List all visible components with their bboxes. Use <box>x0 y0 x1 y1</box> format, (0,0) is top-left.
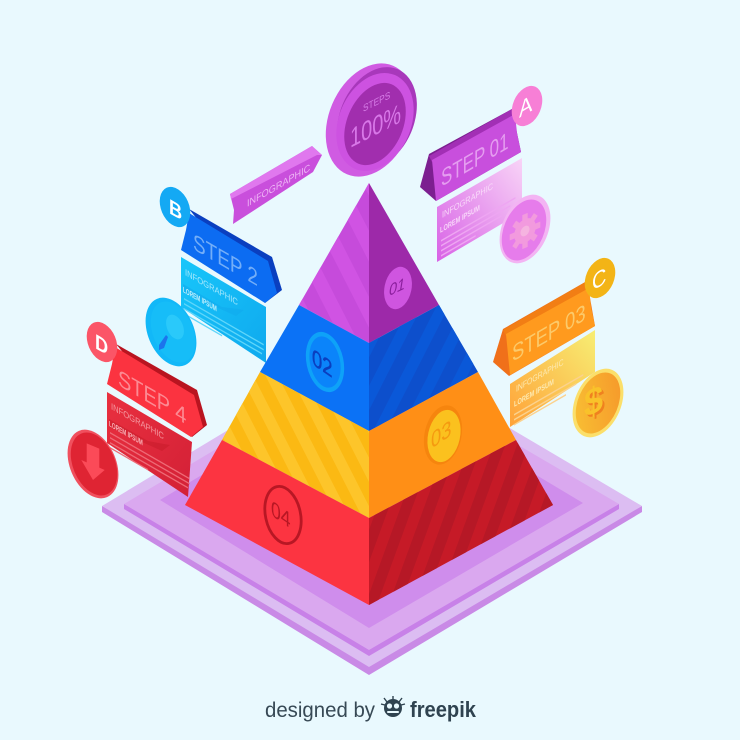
step 03 ribbon: STEP 03 <box>512 298 586 367</box>
step 2 text card <box>181 257 266 363</box>
step 03 text card <box>510 330 595 427</box>
step 2 letter badge <box>154 182 196 232</box>
step 4 ribbon <box>107 344 207 437</box>
step 03 letter badge <box>579 253 621 303</box>
number badge 03 <box>419 402 467 468</box>
step 2 ribbon <box>181 209 282 303</box>
step 2 text card: INFOGRAPHIC <box>185 267 238 308</box>
layer 02 blue <box>260 305 478 431</box>
step 01 letter badge: A <box>519 89 533 123</box>
panel: step 4 <box>58 317 207 506</box>
step 4 letter badge <box>81 317 123 367</box>
footer attribution: designed by <box>265 699 375 722</box>
layer 03 yellow orange <box>222 372 516 518</box>
step 01 text card: LOREM IPSUM <box>440 203 480 235</box>
number badge 02 <box>301 328 349 396</box>
number badge 03: 03 <box>431 414 451 454</box>
panel: 100% steps coin: STEPS <box>363 90 391 115</box>
step 4 ribbon: STEP 4 <box>118 364 187 430</box>
base platform <box>102 345 642 675</box>
layer 01 purple <box>299 183 439 343</box>
panel: 100% steps coin: 100% <box>350 98 401 154</box>
panel: step 2 <box>136 182 282 374</box>
step 01 letter badge <box>506 81 548 131</box>
number badge 04 <box>260 483 306 547</box>
icon: dollar coin <box>563 361 633 445</box>
footer attribution: freepik <box>410 697 477 722</box>
number badge 04: 04 <box>271 495 291 534</box>
layer 04 red <box>185 440 553 605</box>
number badge 02: 02 <box>312 343 332 383</box>
step 4 text card: LOREM IPSUM <box>109 419 143 448</box>
number badge 01: 01 <box>389 275 405 300</box>
icon: blue coin <box>136 290 206 374</box>
panel: 100% steps coin <box>309 50 432 190</box>
step 4 text card <box>107 392 192 497</box>
panel: infographic ribbon <box>230 146 322 224</box>
icon: dollar coin: $ <box>584 376 603 426</box>
icon: gear coin <box>490 187 560 271</box>
step 01 ribbon <box>420 109 521 201</box>
pyramid <box>185 183 553 605</box>
panel: infographic ribbon: INFOGRAPHIC <box>247 162 310 210</box>
icon: freepik logo <box>381 696 405 717</box>
step 2 ribbon: STEP 2 <box>193 228 258 292</box>
step 2 text card: LOREM IPSUM <box>183 285 217 314</box>
panel: step 01 <box>420 81 560 271</box>
step 4 letter badge: D <box>95 330 108 361</box>
footer attribution <box>265 696 477 722</box>
step 03 ribbon <box>493 281 595 376</box>
step 03 text card: INFOGRAPHIC <box>516 356 564 394</box>
step 03 text card: LOREM IPSUM <box>514 377 554 409</box>
step 01 text card <box>437 158 522 262</box>
step 03 letter badge: C <box>592 262 606 296</box>
step 01 ribbon: STEP 01 <box>441 127 509 193</box>
number badge 01 <box>380 264 416 312</box>
icon: down arrow coin <box>58 422 128 506</box>
step 2 letter badge: B <box>169 195 182 226</box>
icon: dollar coin: $ <box>586 378 605 428</box>
panel: step 03 <box>493 253 633 445</box>
step 4 text card: INFOGRAPHIC <box>111 401 164 442</box>
step 01 text card: INFOGRAPHIC <box>442 180 494 220</box>
